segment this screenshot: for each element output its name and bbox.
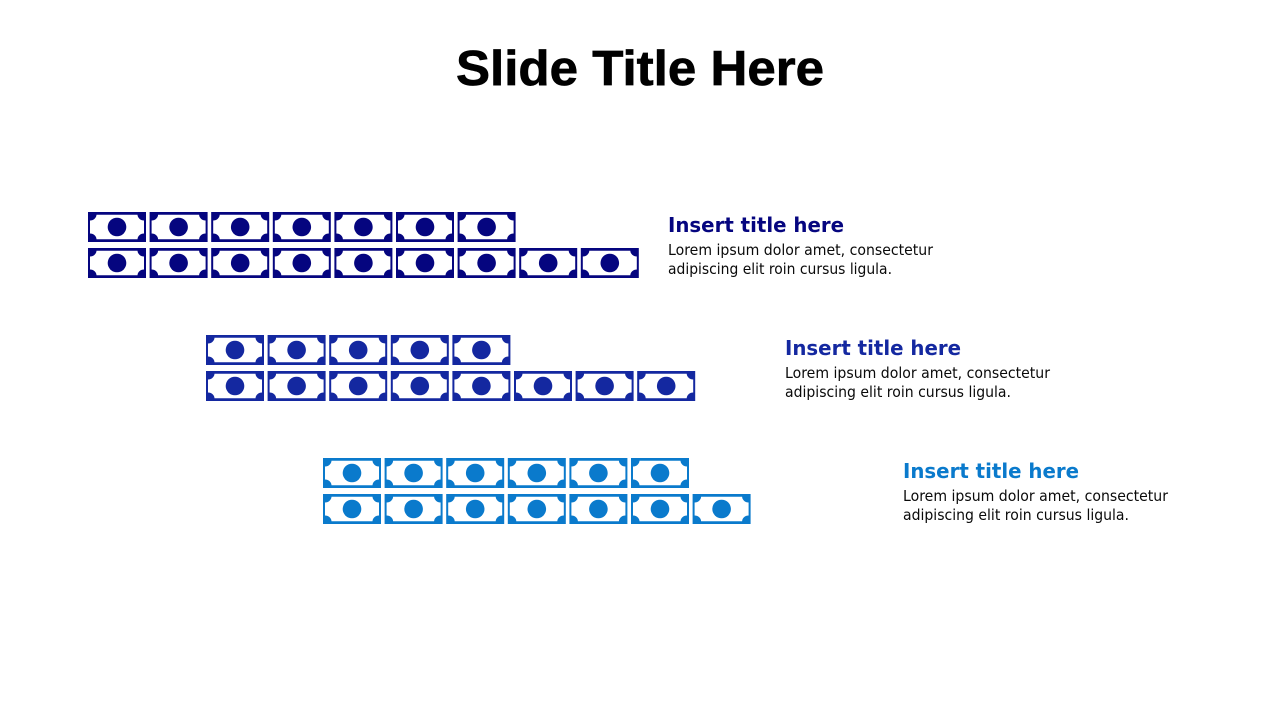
- text block 1: adipiscing elit roin cursus ligula.: [668, 260, 892, 278]
- text block 2: [785, 336, 1051, 401]
- text block 2: Lorem ipsum dolor amet, consectetur: [785, 364, 1051, 382]
- text block 1: Insert title here: [668, 213, 844, 237]
- text block 2: Insert title here: [785, 336, 961, 360]
- row group 1: navy bills: [88, 212, 639, 278]
- text block 3: [903, 459, 1169, 524]
- text block 2: adipiscing elit roin cursus ligula.: [785, 383, 1011, 401]
- row group 3: light blue bills: [323, 458, 751, 524]
- text block 3: Lorem ipsum dolor amet, consectetur: [903, 487, 1169, 505]
- text block 3: Insert title here: [903, 459, 1079, 483]
- text block 1: [668, 213, 934, 278]
- title: Slide Title Here: [456, 42, 824, 96]
- text block 3: adipiscing elit roin cursus ligula.: [903, 506, 1129, 524]
- text block 1: Lorem ipsum dolor amet, consectetur: [668, 241, 934, 259]
- row group 2: blue bills: [206, 335, 695, 401]
